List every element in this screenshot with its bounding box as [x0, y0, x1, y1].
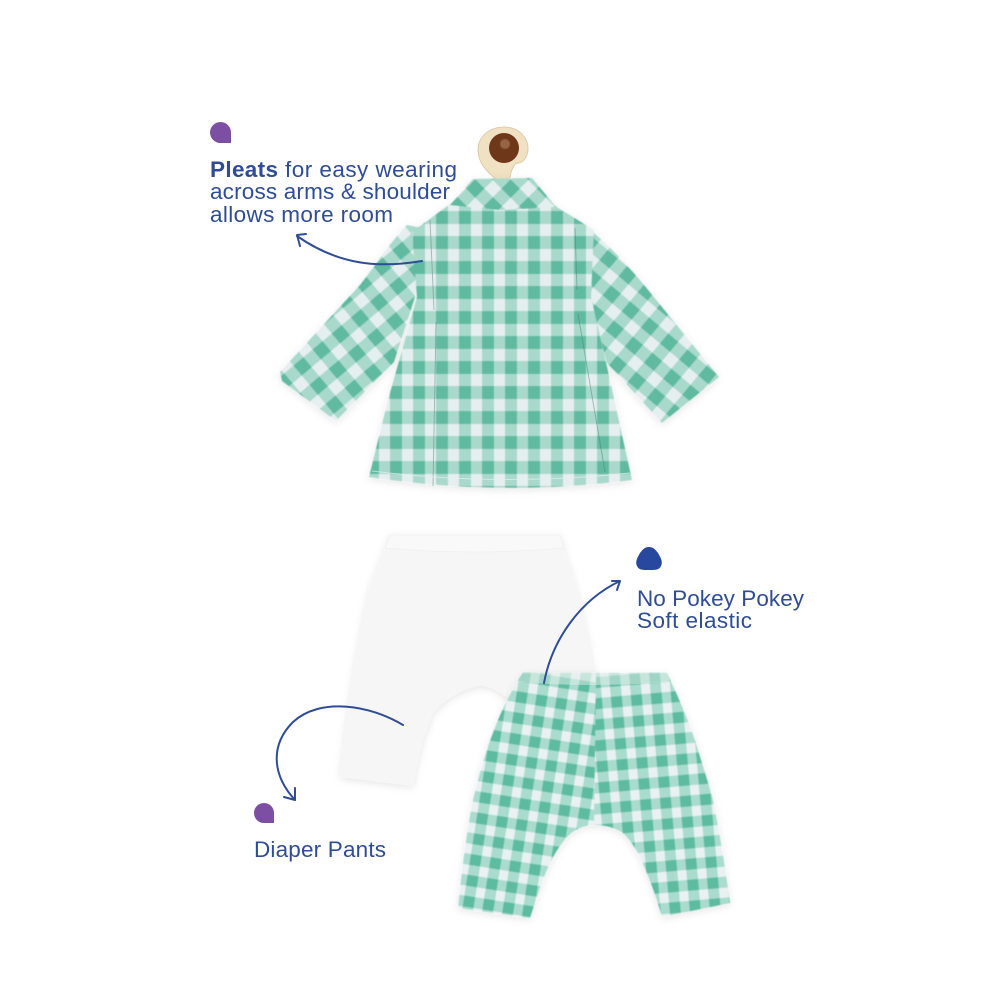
photo: checked pants: [458, 673, 730, 918]
shirt body: [369, 204, 632, 488]
callout text: pleats: Pleats: [210, 157, 278, 182]
pleat lines: [430, 220, 605, 486]
arrow: diaper pants: [277, 706, 403, 800]
arrow: elastic: [544, 581, 620, 683]
hem stitching: [372, 471, 630, 480]
callout text: diaper pants: Diaper Pants: [254, 837, 386, 862]
callout text: pleats: [210, 157, 457, 227]
callout text: pleats: for easy wearing: [285, 157, 457, 182]
callout: soft elastic: [636, 547, 805, 633]
right leg: [594, 673, 730, 917]
icon: blue rounded triangle: [636, 547, 662, 570]
photo: checked shirt: [280, 178, 719, 488]
callout: diaper pants: [254, 803, 386, 862]
callout text: elastic: [637, 586, 805, 633]
waistband: [385, 535, 564, 552]
left sleeve: [280, 225, 432, 421]
arrow: pleats: [297, 234, 422, 264]
icon: purple drop: [254, 803, 274, 823]
photo: wooden hanger hook: [478, 127, 528, 180]
callout text: elastic: No Pokey Pokey: [637, 586, 805, 611]
callout text: elastic: Soft elastic: [637, 608, 752, 633]
icon: purple drop: [210, 122, 231, 143]
callout text: pleats: across arms & shoulder: [210, 179, 450, 204]
left leg: [458, 673, 598, 918]
callout text: pleats: allows more room: [210, 202, 393, 227]
right sleeve: [575, 230, 719, 423]
collar: [450, 178, 556, 210]
photo: white diaper pants: [340, 535, 594, 786]
elastic waistband: [518, 673, 670, 685]
callout: pleats: [210, 122, 457, 227]
